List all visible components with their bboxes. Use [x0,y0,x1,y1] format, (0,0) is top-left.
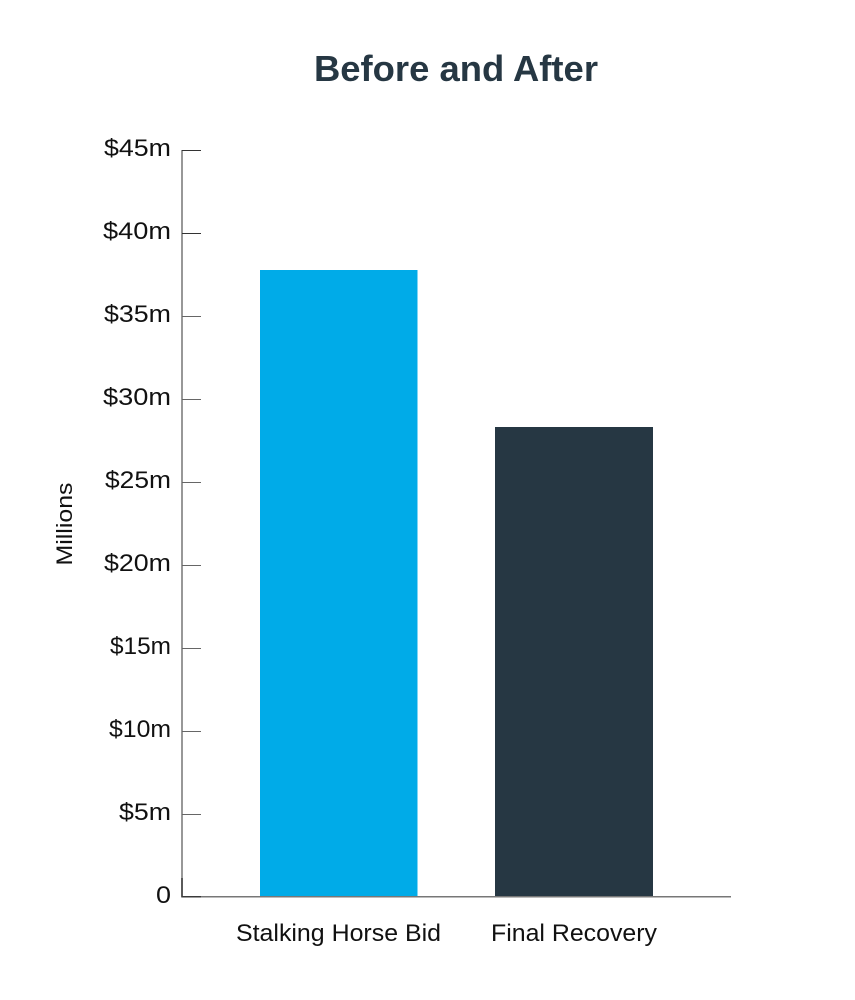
bar: Final Recovery [495,427,653,897]
bar: Stalking Horse Bid [260,270,418,897]
y axis labels: $20m [104,550,171,577]
title: Before and After [314,48,598,89]
y axis with ticks [182,150,731,897]
x axis labels: Final Recovery [491,920,657,947]
y axis labels: $30m [103,384,171,411]
y axis labels: $35m [104,301,171,328]
y axis labels: $45m [104,135,171,162]
x axis labels [236,920,657,947]
y axis labels: $40m [103,218,171,245]
y axis labels [103,135,171,909]
x axis labels: Stalking Horse Bid [236,920,441,947]
y axis labels: $10m [109,716,171,743]
y axis labels: 0 [156,882,171,909]
y axis title: Millions [52,482,77,566]
y axis labels: $25m [105,467,171,494]
y axis labels: $5m [119,799,171,826]
y axis labels: $15m [110,633,171,660]
